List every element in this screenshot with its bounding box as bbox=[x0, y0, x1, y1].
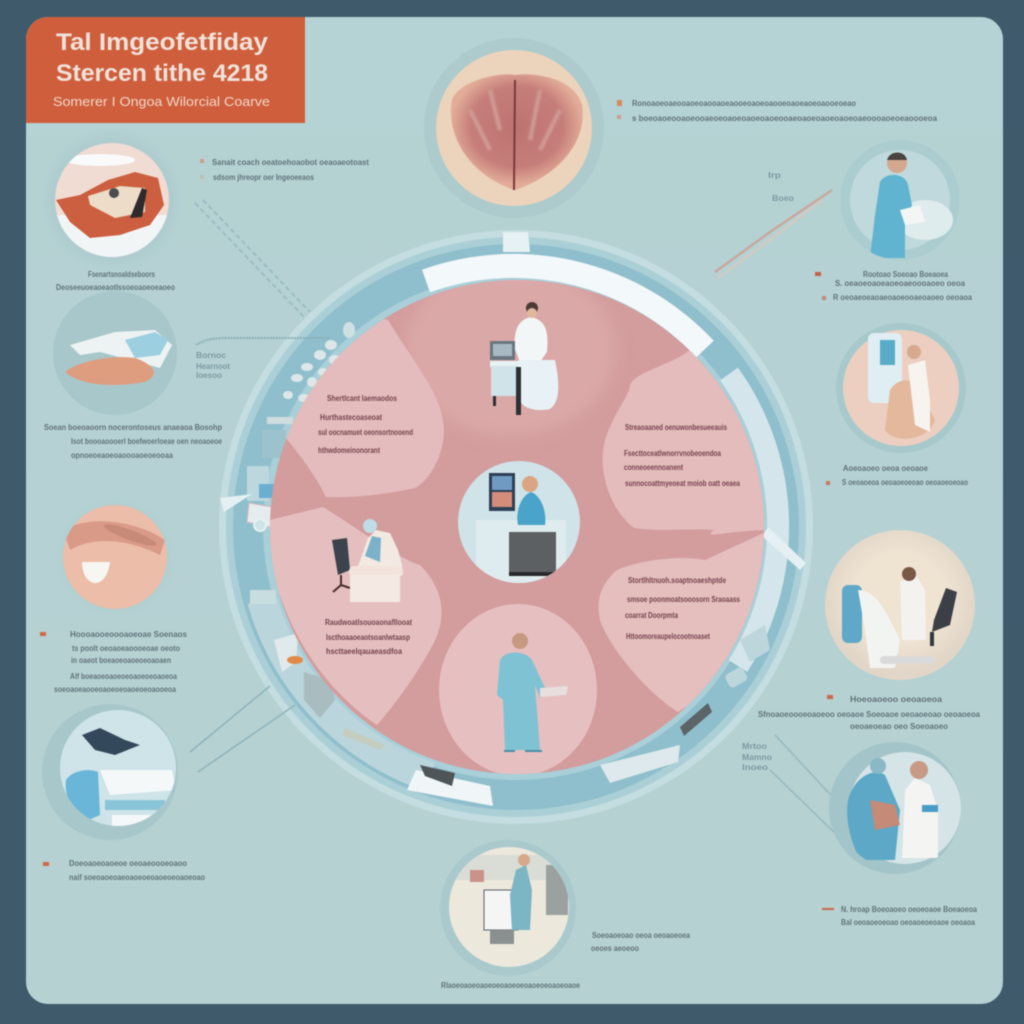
ring segment: right clip bbox=[762, 527, 806, 570]
circle 9: two doctors bbox=[829, 742, 961, 874]
caption: circle 3 below: ts poolt oeoaoeaoooeoae oeoto bbox=[72, 644, 180, 653]
caption: circle 9 below: N. hroap Boeoaoeo oeoeoaoe Boeaoeoa bbox=[841, 905, 977, 914]
title banner bbox=[26, 17, 305, 123]
caption: circle 6 left and below: R oeoaeoeaoaeoaoeooaeoaoeo oeoaoa bbox=[833, 293, 973, 302]
caption: circle 1 below: Deoseeuoeaoeaotlssoeoaoeoeaoeo bbox=[56, 283, 175, 292]
caption: circle 1 below bbox=[56, 270, 175, 292]
caption: circle 2 below: Isot boooaoooerl boefwoerloeae oen neoaoeoe bbox=[71, 437, 222, 446]
top circle caption bbox=[617, 99, 938, 123]
caption: lower right short: Mrtoo bbox=[742, 742, 767, 751]
caption: circle 2 right: Ioesoo bbox=[196, 371, 222, 380]
caption: circle 6 left and below: Irp bbox=[768, 171, 781, 180]
ring segment: bottom-right devices bbox=[600, 625, 770, 783]
text block: bottom right lobe: Httoomoreaupelocootnoaset bbox=[626, 632, 710, 641]
circle 3: eye bbox=[62, 504, 168, 610]
caption: circle 8 below bbox=[758, 695, 981, 731]
center monitor bbox=[509, 532, 556, 574]
caption: lower right short bbox=[742, 742, 772, 772]
text block: top right lobe: Fsecttoceatlwnorrvnobeoendoa bbox=[624, 449, 721, 458]
circle 2: hands bbox=[53, 291, 177, 415]
circle 6: doctor in blue gown bbox=[840, 140, 960, 260]
caption: circle 10 right: Soeoaoeoao oeoa oeoaoeoea bbox=[592, 931, 690, 940]
caption: circle 2 right: Bornoc bbox=[196, 351, 227, 360]
caption: circle 7 below: S oeoaoeoa oeoaoeoeoao oeoaoeoeoao bbox=[842, 478, 968, 487]
text block: bottom right lobe: smsoe poonmoatsooosorn Sraoaass bbox=[627, 595, 740, 604]
caption: circle 6 left and below: Rootoao Soeoao Boeaoea bbox=[863, 270, 948, 279]
text block: top left lobe: sul oocnamuet oeonsortnooend bbox=[318, 428, 413, 437]
lobe: bottom left bbox=[270, 507, 441, 725]
connector: lower left tube bbox=[190, 686, 295, 772]
caption: circle 9 below bbox=[822, 905, 977, 927]
icon: left doctor seated bbox=[332, 519, 403, 602]
circle 10: clinic room bbox=[440, 840, 576, 976]
circle 8: doctor with patient and chair bbox=[825, 530, 975, 680]
pink diagram bbox=[270, 265, 770, 776]
caption: circle 4 below bbox=[43, 859, 205, 882]
text block: bottom left lobe: hscttaeelqauaeasdfoa bbox=[326, 647, 402, 656]
text block: bottom left lobe: Raudwoatlsouoaonafllooat bbox=[325, 618, 412, 627]
top soft lobe bbox=[410, 280, 610, 431]
caption: circle 8 below: oeoaeoeao oeo Soeoaoeo bbox=[850, 722, 948, 731]
text block: top right lobe: sunnocoattmyeoeat moiob oatt oeaea bbox=[625, 479, 740, 488]
caption: circle 10 right bbox=[591, 931, 690, 953]
text block: bottom right lobe: coarrat Doorpmta bbox=[625, 611, 678, 620]
title banner: Tal Imgeofetfiday bbox=[56, 29, 269, 56]
ring segment: left devices bbox=[220, 466, 278, 531]
lobe: bottom bbox=[439, 604, 597, 776]
caption: circle 3 below: soeoaoeaooeoaoeoeoaoeoeoaooeoa bbox=[54, 685, 176, 694]
caption: circle 2 right bbox=[196, 351, 230, 380]
caption: circle 3 below: in oaeot boeaoeoaoeoeoaoaen bbox=[71, 656, 171, 665]
center desk bbox=[476, 520, 566, 585]
top circle caption: s boeoaoeooaoeooaeoeoaoeoaoeoaoeooaeoaoeoaoeoaoeoaeoooaoeoeaoooeoa bbox=[632, 114, 938, 123]
title banner: Somerer I Ongoa Wilorcial Coarve bbox=[53, 95, 270, 109]
caption: circle 2 below: Soean boeoaoorn nocerontoseus anaeaoa Bosohp bbox=[44, 423, 222, 432]
caption: lower right short: Inoeo bbox=[742, 763, 768, 772]
caption: circle 10 right: oeoes aeoeoo bbox=[591, 944, 639, 953]
caption: circle 4 below: Doeoaoeoaoeoe oeoaeoooeoaoo bbox=[69, 859, 187, 868]
caption: circle 1 right: sdsom jhreopr oer Ingeoeeaos bbox=[213, 173, 314, 182]
ring segment: white band top bbox=[426, 266, 705, 349]
text block: top left lobe bbox=[318, 394, 413, 455]
caption: circle 3 below: Hoooaooeoooaoeoae Soenaos bbox=[70, 630, 188, 639]
ring segment: pills left bbox=[262, 322, 355, 458]
caption: lower right short: Mamno bbox=[742, 753, 772, 762]
text block: top right lobe bbox=[624, 423, 740, 488]
caption: circle 2 below bbox=[44, 423, 222, 460]
connector: lower right tube bbox=[770, 735, 840, 838]
ring segment: bottom-left devices bbox=[250, 590, 493, 806]
circle 4: blue machine bbox=[42, 704, 178, 840]
caption: circle 2 below: opnoeoeaoeoaoooaoeoeooaa bbox=[71, 451, 173, 460]
ring segment: top notch bbox=[503, 232, 530, 252]
top circle caption: Ronoaoeoaeooaoeoaooaoeaooeoaoeoaooeoaoeaoeoaooeoeao bbox=[632, 99, 856, 108]
icon: bottom figure in blue gown bbox=[497, 633, 568, 752]
text block: top left lobe: Hurthastecoaseoat bbox=[320, 413, 382, 422]
connector: upper left dashed device bbox=[195, 200, 310, 318]
caption: circle 1 right: Sanait coach oeatoehoaobot oeaoaeotoast bbox=[212, 158, 369, 167]
text block: bottom right lobe bbox=[625, 576, 740, 641]
center screen bbox=[489, 473, 515, 511]
ring segment: pale right band bbox=[729, 374, 778, 666]
lobe: top right bbox=[603, 340, 770, 534]
caption: circle 3 below bbox=[40, 630, 188, 694]
text block: top right lobe: Streaoaaned oenuwonbesueeauis bbox=[625, 423, 727, 432]
caption: circle 4 below: naif soeoaoeoaeoaoeoeoaoeoeoaoeoao bbox=[69, 873, 205, 882]
connector: left line to ring bbox=[196, 338, 330, 345]
circle 1: patient with red cloth bbox=[54, 142, 170, 258]
caption: circle 1 right bbox=[200, 158, 369, 182]
text block: top left lobe: hthwdomeinonorant bbox=[318, 446, 380, 455]
central ring bbox=[219, 230, 813, 824]
connector: upper right needle bbox=[715, 190, 832, 278]
center figure bbox=[517, 492, 545, 525]
caption: circle 6 left and below: Boeo bbox=[772, 194, 794, 203]
lobe: top left bbox=[286, 319, 444, 498]
center circle bbox=[458, 461, 580, 583]
text block: top left lobe: Shertlcant laemaodos bbox=[327, 394, 397, 403]
caption: circle 7 below: Aoeoaoeo oeoa oeoaoe bbox=[843, 464, 929, 473]
text block: bottom left lobe: Iscthoaaoeaotsoanlwtaasp bbox=[326, 633, 410, 642]
circle 7: imaging machine and patient bbox=[836, 323, 966, 453]
top circle: tissue bbox=[436, 50, 592, 206]
lobe: bottom right bbox=[599, 530, 770, 712]
text block: top right lobe: conneoeennoanent bbox=[624, 463, 683, 472]
text block: bottom right lobe: Stortlhltnuoh.soaptnoaeshptde bbox=[628, 576, 726, 585]
caption: circle 3 below: Alf boeaoeoaoeoeoaoeoeoaoeoa bbox=[70, 672, 177, 681]
text block: bottom left lobe bbox=[325, 618, 412, 656]
caption: circle 2 right: Hearnoot bbox=[196, 362, 230, 371]
caption: circle 9 below: Bal oeoaoeoeoao oeoaoeoeoaoe oeoaoa bbox=[841, 918, 975, 927]
caption: circle 6 left and below bbox=[768, 171, 973, 302]
title banner: Stercen tithe 4218 bbox=[56, 60, 268, 87]
caption: circle 7 below bbox=[826, 464, 968, 487]
caption: circle 8 below: Sfnoaoeoooeoaoeoo oeoaoe Soeoaoe oeoaoeoao oeoaoeoa bbox=[758, 710, 981, 719]
ring segment: pale lower left band bbox=[262, 600, 430, 777]
icon: top doctor at desk bbox=[490, 302, 558, 415]
caption: circle 8 below: Hoeoaoeoo oeoaoeoa bbox=[850, 695, 943, 704]
caption: circle 1 below: Fsenartsnoaldseboors bbox=[88, 270, 155, 279]
caption: circle 6 left and below: S. oeaoeoaoeaoeoaeoooaoeo oeoa bbox=[835, 279, 966, 288]
caption: circle 10 below: Rlaoeoaoeoaoeoeoaoeoeoaoeoeoaoeoaoe bbox=[441, 981, 580, 990]
